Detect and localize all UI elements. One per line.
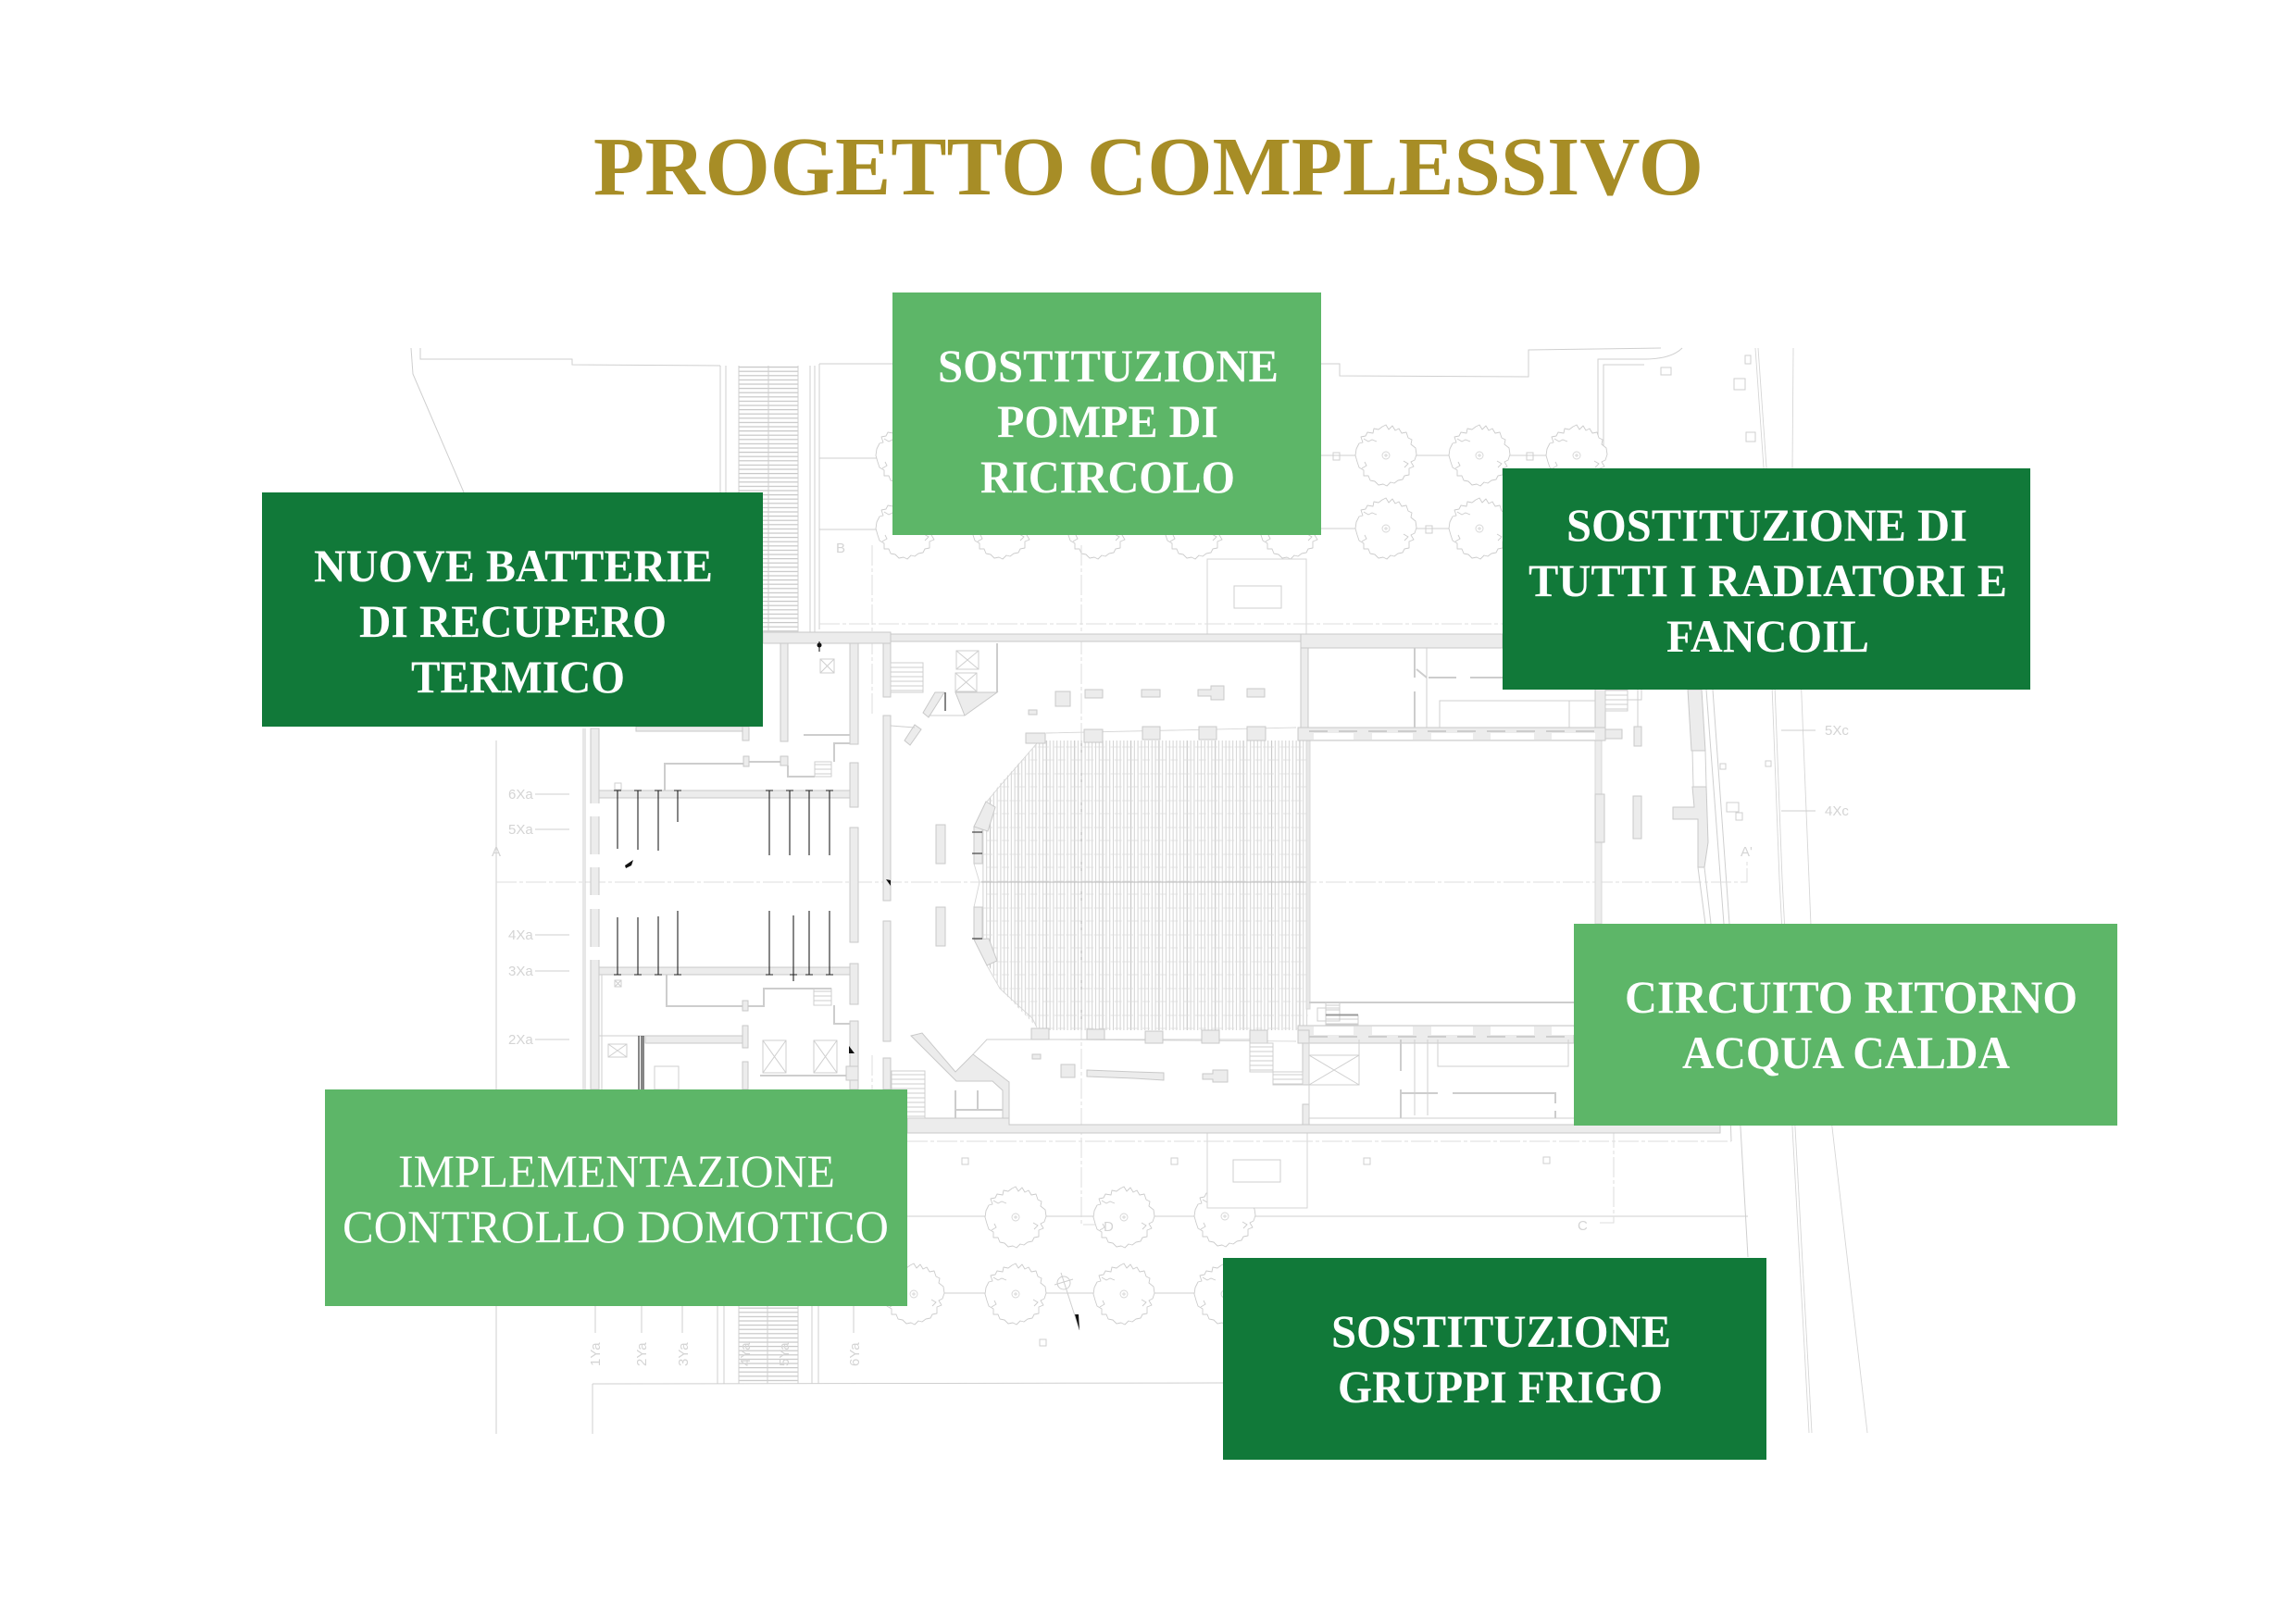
south ramp <box>718 1306 818 1384</box>
trees <box>876 425 1607 1325</box>
grid references: B <box>836 541 845 556</box>
label text: FANCOIL <box>1666 610 1869 662</box>
lamp posts <box>962 355 1771 1346</box>
floor plan drawing <box>411 348 1867 1434</box>
label text <box>343 1145 889 1252</box>
grid references: 3Ya <box>676 1342 692 1366</box>
label text <box>938 340 1279 503</box>
stairs and lift shafts <box>608 651 1628 1118</box>
panel: sostituzione pompe di ricircolo <box>892 292 1321 535</box>
label text <box>1625 971 2078 1078</box>
label text: SOSTITUZIONE <box>938 340 1279 392</box>
grid references: 1Ya <box>588 1342 604 1366</box>
label text: RICIRCOLO <box>980 451 1235 503</box>
label text: ACQUA CALDA <box>1682 1027 2010 1078</box>
auditorium seating <box>974 728 1308 1041</box>
label text: NUOVE BATTERIE <box>314 540 713 591</box>
grid references: 4Ya <box>738 1342 754 1366</box>
landing platforms <box>1207 559 1307 1208</box>
grid references: A <box>492 844 501 860</box>
black section lines <box>614 641 982 1089</box>
north ramp <box>720 366 815 632</box>
grid references: 6Ya <box>847 1342 863 1366</box>
panel: nuove batterie di recupero termico <box>262 492 763 727</box>
label text: TUTTI I RADIATORI E <box>1529 554 2007 606</box>
grid references: C <box>1578 1218 1588 1234</box>
building walls <box>583 632 1720 1133</box>
label text: SOSTITUZIONE DI <box>1566 499 1967 551</box>
label text: DI RECUPERO <box>359 595 667 647</box>
grid references: 2Xa <box>508 1032 533 1048</box>
north arrow <box>1054 1273 1079 1330</box>
label text: TERMICO <box>411 651 625 703</box>
grid references: 6Xa <box>508 787 533 803</box>
grid references: 5Ya <box>777 1342 792 1366</box>
panel: sostituzione gruppi frigo <box>1223 1258 1766 1460</box>
grid references: 4Xc <box>1825 803 1849 819</box>
grid references: 3Xa <box>508 964 533 979</box>
grid references: A' <box>1741 844 1753 860</box>
grid references: 5Xc <box>1825 723 1849 739</box>
panel: sostituzione di tutti i radiatori e fancoil <box>1503 468 2030 690</box>
label text <box>1529 499 2007 662</box>
site outline and road lines <box>411 348 1867 1434</box>
columns and stage blocks <box>936 686 1309 1082</box>
label text <box>1331 1305 1671 1413</box>
axis lines <box>496 545 1747 1225</box>
grid references: 4Xa <box>508 927 533 943</box>
label text: SOSTITUZIONE <box>1331 1305 1671 1357</box>
label text <box>314 540 713 703</box>
panel: circuito ritorno acqua calda <box>1574 924 2117 1126</box>
grid references: 5Xa <box>508 822 533 838</box>
grid references <box>492 541 1849 1366</box>
panel: implementazione controllo domotico <box>325 1089 907 1306</box>
title: PROGETTO COMPLESSIVO <box>593 121 1703 213</box>
label text: CONTROLLO DOMOTICO <box>343 1201 889 1252</box>
label text: GRUPPI FRIGO <box>1338 1361 1663 1413</box>
label text: IMPLEMENTAZIONE <box>398 1145 835 1197</box>
grid references: D <box>1104 1219 1114 1235</box>
label text: POMPE DI <box>997 395 1218 447</box>
label text: CIRCUITO RITORNO <box>1625 971 2078 1023</box>
grid references: 2Ya <box>634 1342 650 1366</box>
